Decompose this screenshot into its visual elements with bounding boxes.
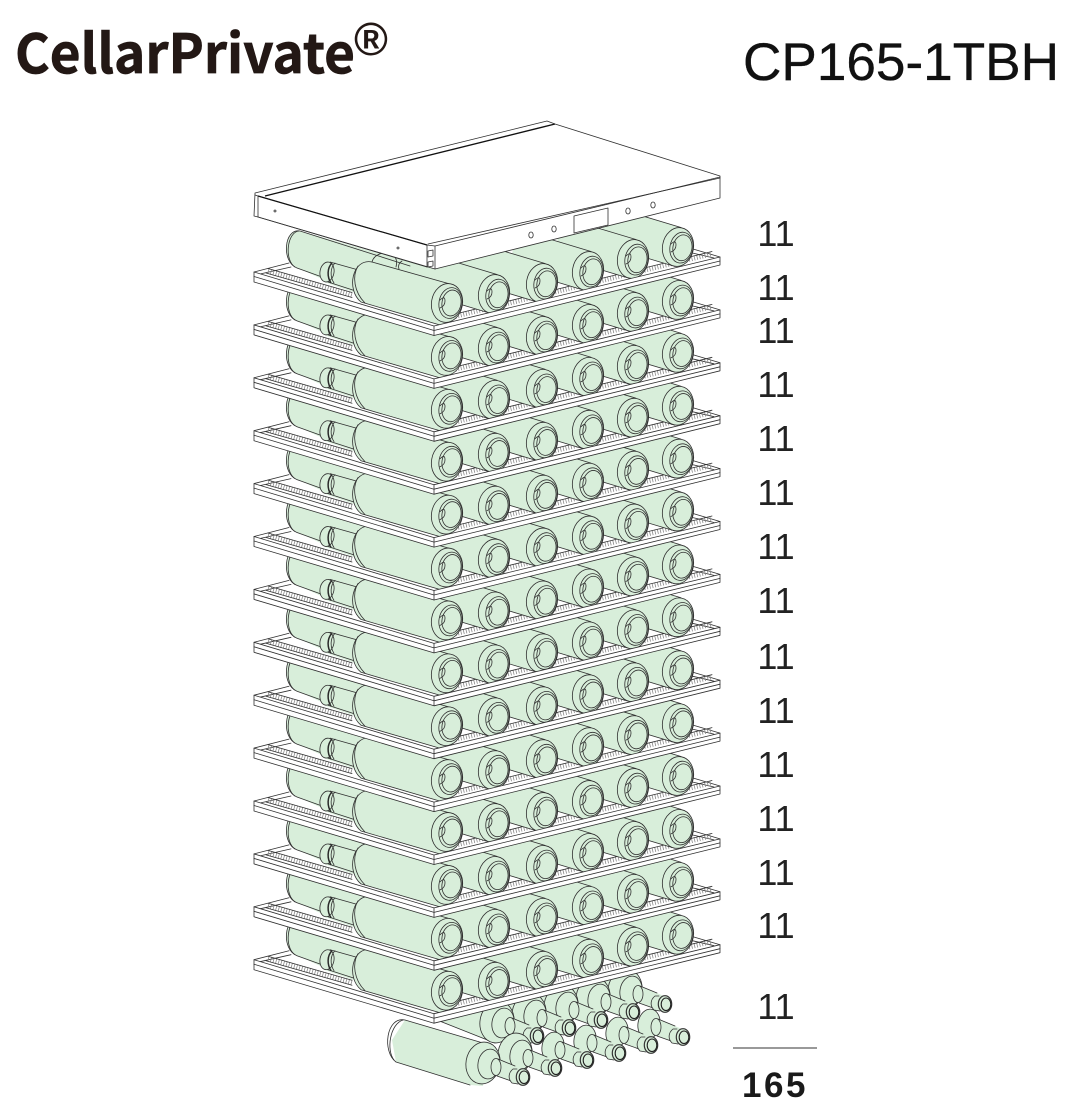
per-shelf bottle counts: 11: [757, 798, 795, 839]
shelf 12 with bottles: [254, 785, 720, 917]
title: CellarPrivate logo: CellarPrivate: [15, 10, 355, 89]
heading: model number: CP165-1TBH: [743, 33, 1059, 92]
per-shelf bottle counts: 11: [757, 744, 795, 785]
per-shelf bottle counts: [757, 213, 795, 1027]
shelf 3 with bottles: [254, 309, 720, 441]
per-shelf bottle counts: 11: [757, 472, 795, 513]
shelf 14 with bottles: [254, 891, 720, 1023]
per-shelf bottle counts: 11: [757, 364, 795, 405]
title: CellarPrivate logo: ®: [354, 13, 388, 65]
hidden bottle arcs behind the top shelf: [372, 253, 402, 269]
shelf 7 with bottles: [254, 520, 720, 653]
per-shelf bottle counts: 11: [757, 580, 795, 621]
shelf 11 with bottles: [254, 732, 720, 864]
per-shelf bottle counts: 11: [757, 852, 795, 893]
shelf 6 with bottles: [254, 468, 720, 600]
shelf 1 with bottles: [254, 203, 720, 336]
top cover panel: [254, 121, 720, 269]
shelf 5 with bottles: [254, 415, 720, 547]
per-shelf bottle counts: 11: [757, 310, 795, 351]
per-shelf bottle counts: 11: [757, 905, 795, 946]
total bottle count: 165: [742, 1066, 808, 1105]
per-shelf bottle counts: 11: [757, 267, 795, 308]
shelf 9 with bottles: [254, 626, 720, 759]
shelf 10 with bottles: [254, 679, 720, 812]
bottom loose bottles: [388, 952, 690, 1087]
per-shelf bottle counts: 11: [757, 690, 795, 731]
shelf 13 with bottles: [254, 838, 720, 970]
shelf 2 with bottles: [254, 256, 720, 388]
per-shelf bottle counts: 11: [757, 418, 795, 459]
per-shelf bottle counts: 11: [757, 636, 795, 677]
per-shelf bottle counts: 11: [757, 986, 795, 1027]
per-shelf bottle counts: 11: [757, 213, 795, 254]
shelf 4 with bottles: [254, 362, 720, 494]
shelf 8 with bottles: [254, 573, 720, 706]
per-shelf bottle counts: 11: [757, 526, 795, 567]
